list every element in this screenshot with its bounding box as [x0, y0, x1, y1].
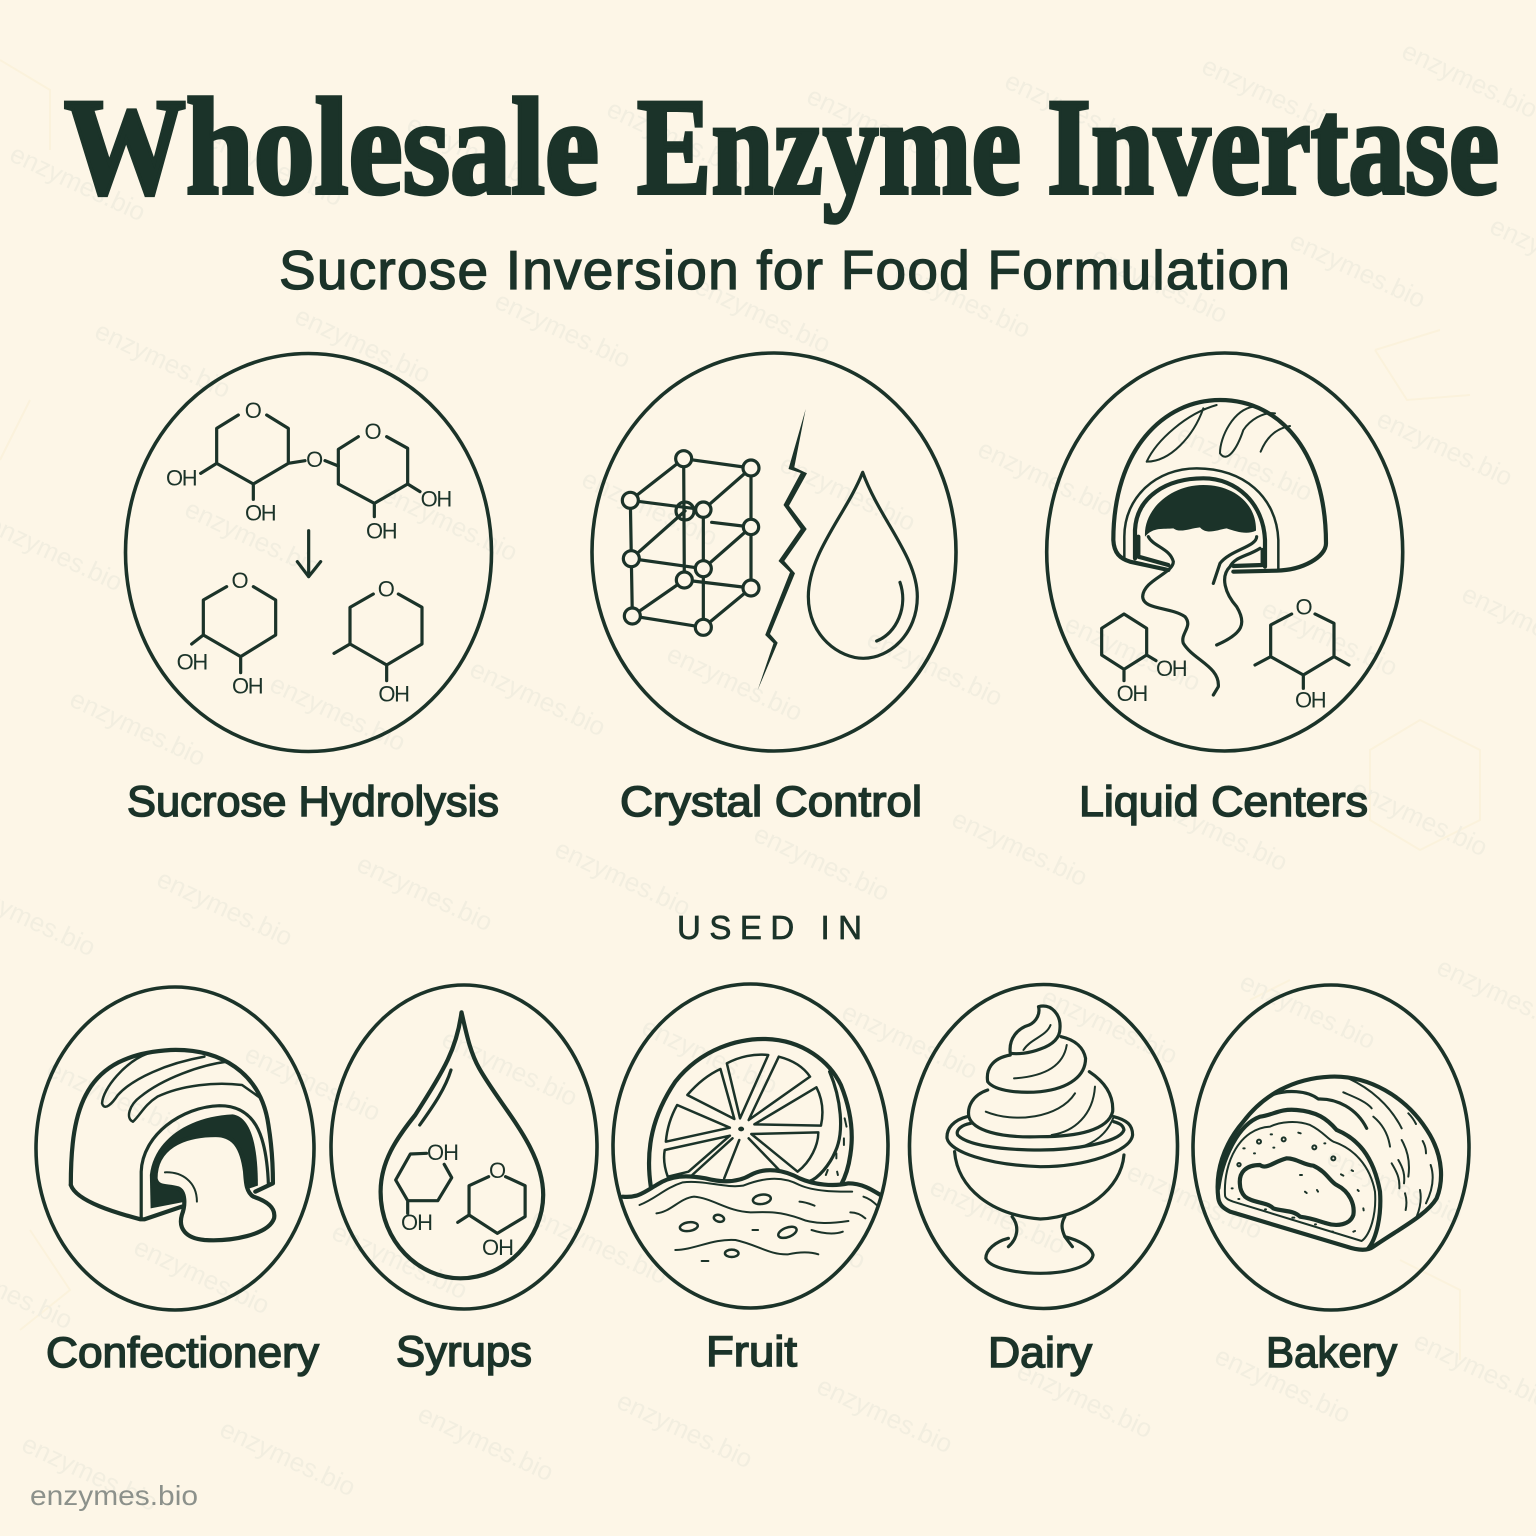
- watermark pattern: enzymes.bio: [1372, 403, 1517, 492]
- watermark pattern: enzymes.bio: [602, 93, 747, 182]
- icon: sucrose hydrolysis molecules: OH: [245, 501, 276, 526]
- icon: sucrose hydrolysis molecules: [166, 398, 451, 706]
- watermark pattern: enzymes.bio: [17, 1428, 162, 1517]
- panel: liquid centers: [1047, 353, 1403, 751]
- label: liquid centers: Liquid Centers: [1079, 778, 1368, 826]
- icon: sucrose hydrolysis molecules: OH: [378, 681, 409, 706]
- title: Enzyme: [637, 70, 1021, 223]
- watermark pattern: enzymes.bio: [527, 1201, 672, 1290]
- icon: citrus slice on fruit puree: [623, 1039, 880, 1307]
- watermark pattern: enzymes.bio: [1037, 981, 1182, 1070]
- icon: sucrose hydrolysis molecules: O: [364, 419, 381, 444]
- watermark pattern: enzymes.bio: [1347, 773, 1492, 862]
- label: syrups: Syrups: [396, 1328, 532, 1376]
- watermark pattern: enzymes.bio: [890, 255, 1035, 344]
- icon: sucrose hydrolysis molecules: O: [245, 398, 262, 423]
- watermark pattern: enzymes.bio: [1087, 240, 1232, 329]
- watermark pattern: enzymes.bio: [42, 1053, 187, 1142]
- watermark pattern: enzymes.bio: [1000, 65, 1145, 154]
- watermark pattern: enzymes.bio: [577, 463, 722, 552]
- watermark pattern: enzymes.bio: [749, 818, 894, 907]
- watermark pattern: enzymes.bio: [129, 1231, 274, 1320]
- watermark pattern: enzymes.bio: [290, 300, 435, 389]
- icon: sucrose hydrolysis molecules: OH: [421, 487, 451, 512]
- watermark pattern: enzymes.bio: [265, 668, 410, 757]
- chemical labels in drop: OH: [427, 1140, 458, 1165]
- icon: filled pastry: [1218, 1077, 1441, 1250]
- panel: crystal control: [592, 353, 956, 751]
- section heading: used in: USED IN: [677, 909, 862, 946]
- watermark pattern: enzymes.bio: [437, 1023, 582, 1112]
- watermark pattern: enzymes.bio: [973, 433, 1118, 522]
- watermark pattern: enzymes.bio: [947, 803, 1092, 892]
- watermark pattern: enzymes.bio: [327, 1216, 472, 1305]
- icon: filled chocolate with liquid center: OH: [1156, 656, 1187, 681]
- watermark pattern: enzymes.bio: [202, 123, 347, 212]
- watermark pattern: enzymes.bio: [152, 863, 297, 952]
- watermark pattern: enzymes.bio: [1235, 966, 1380, 1055]
- watermark pattern: enzymes.bio: [1060, 608, 1205, 697]
- watermark pattern: enzymes.bio: [1172, 418, 1317, 507]
- watermark pattern: enzymes.bio: [465, 653, 610, 742]
- watermark pattern: enzymes.bio: [1322, 1141, 1467, 1230]
- label: fruit: Fruit: [706, 1328, 797, 1376]
- icon: filled chocolate with liquid center: O: [1295, 595, 1312, 620]
- brand footer: enzymes.bio: [30, 1480, 198, 1511]
- watermark pattern: enzymes.bio: [725, 1186, 870, 1275]
- icon: liquid drop: [808, 472, 917, 658]
- panel: dairy: [910, 984, 1178, 1308]
- panel: fruit: [613, 984, 888, 1308]
- panel: confectionery: [36, 987, 314, 1310]
- chemical labels in drop: OH: [482, 1235, 513, 1260]
- panel: bakery: [1193, 985, 1469, 1310]
- icon: sucrose hydrolysis molecules: OH: [166, 466, 197, 491]
- watermark pattern: enzymes.bio: [690, 270, 835, 359]
- label: sucrose hydrolysis: Sucrose Hydrolysis: [127, 778, 499, 826]
- icon: sucrose hydrolysis molecules: OH: [366, 518, 397, 543]
- icon: sucrose hydrolysis molecules: OH: [177, 649, 207, 674]
- label: confectionery: Confectionery: [46, 1329, 320, 1377]
- icon: filled chocolate with liquid center: [1102, 400, 1349, 712]
- icon: filled truffle: [71, 1050, 274, 1240]
- chemical labels in drop: [401, 1140, 513, 1260]
- icon: filled chocolate with liquid center: OH: [1295, 687, 1326, 712]
- icon: sucrose hydrolysis molecules: OH: [232, 673, 263, 698]
- watermark pattern: enzymes.bio: [612, 1385, 757, 1474]
- watermark pattern: enzymes.bio: [550, 833, 695, 922]
- watermark pattern: enzymes.bio: [1285, 225, 1430, 314]
- watermark pattern: enzymes.bio: [1197, 50, 1342, 139]
- watermark pattern: enzymes.bio: [90, 315, 235, 404]
- watermark pattern: enzymes.bio: [775, 448, 920, 537]
- watermark pattern: enzymes.bio: [1012, 1355, 1157, 1444]
- watermark pattern: enzymes.bio: [862, 623, 1007, 712]
- watermark pattern: enzymes.bio: [377, 478, 522, 567]
- icon: crystal lattice: [622, 451, 759, 635]
- watermark pattern: enzymes.bio: [637, 1011, 782, 1100]
- icon: sucrose hydrolysis molecules: O: [231, 568, 248, 593]
- panel: syrups: [331, 985, 597, 1309]
- label: dairy: Dairy: [988, 1329, 1093, 1377]
- watermark pattern: enzymes.bio: [812, 1370, 957, 1459]
- watermark pattern: enzymes.bio: [925, 1171, 1070, 1260]
- watermark pattern: enzymes.bio: [1257, 593, 1402, 682]
- icon: syrup drop with sugars: [381, 1012, 543, 1278]
- watermark pattern: enzymes.bio: [837, 996, 982, 1085]
- icon: jagged fracture: [758, 409, 807, 690]
- watermark pattern: enzymes.bio: [413, 1398, 558, 1487]
- watermark pattern: enzymes.bio: [5, 138, 150, 227]
- icon: sucrose hydrolysis molecules: O: [306, 447, 323, 472]
- watermark pattern: enzymes.bio: [402, 108, 547, 197]
- watermark pattern: enzymes.bio: [1122, 1156, 1267, 1245]
- watermark pattern: enzymes.bio: [65, 683, 210, 772]
- title: Wholesale: [64, 70, 599, 223]
- watermark pattern: enzymes.bio: [180, 493, 325, 582]
- icon: sucrose hydrolysis molecules: O: [378, 576, 395, 601]
- label: bakery: Bakery: [1266, 1329, 1397, 1377]
- watermark pattern: enzymes.bio: [490, 285, 635, 374]
- icon: ice cream in bowl: [947, 1006, 1133, 1273]
- watermark pattern: enzymes.bio: [1147, 788, 1292, 877]
- subtitle: Sucrose Inversion for Food Formulation: [279, 239, 1290, 301]
- chemical labels in drop: O: [489, 1158, 506, 1183]
- watermark pattern: enzymes.bio: [1210, 1340, 1355, 1429]
- icon: filled chocolate with liquid center: OH: [1117, 681, 1147, 706]
- watermark pattern: enzymes.bio: [802, 80, 947, 169]
- watermark pattern: enzymes.bio: [240, 1038, 385, 1127]
- watermark pattern: enzymes.bio: [352, 848, 497, 937]
- label: crystal control: Crystal Control: [620, 778, 922, 826]
- watermark pattern: enzymes.bio: [215, 1413, 360, 1502]
- panel: sucrose hydrolysis: [126, 354, 492, 752]
- watermark pattern: enzymes.bio: [662, 638, 807, 727]
- chemical labels in drop: OH: [401, 1210, 432, 1235]
